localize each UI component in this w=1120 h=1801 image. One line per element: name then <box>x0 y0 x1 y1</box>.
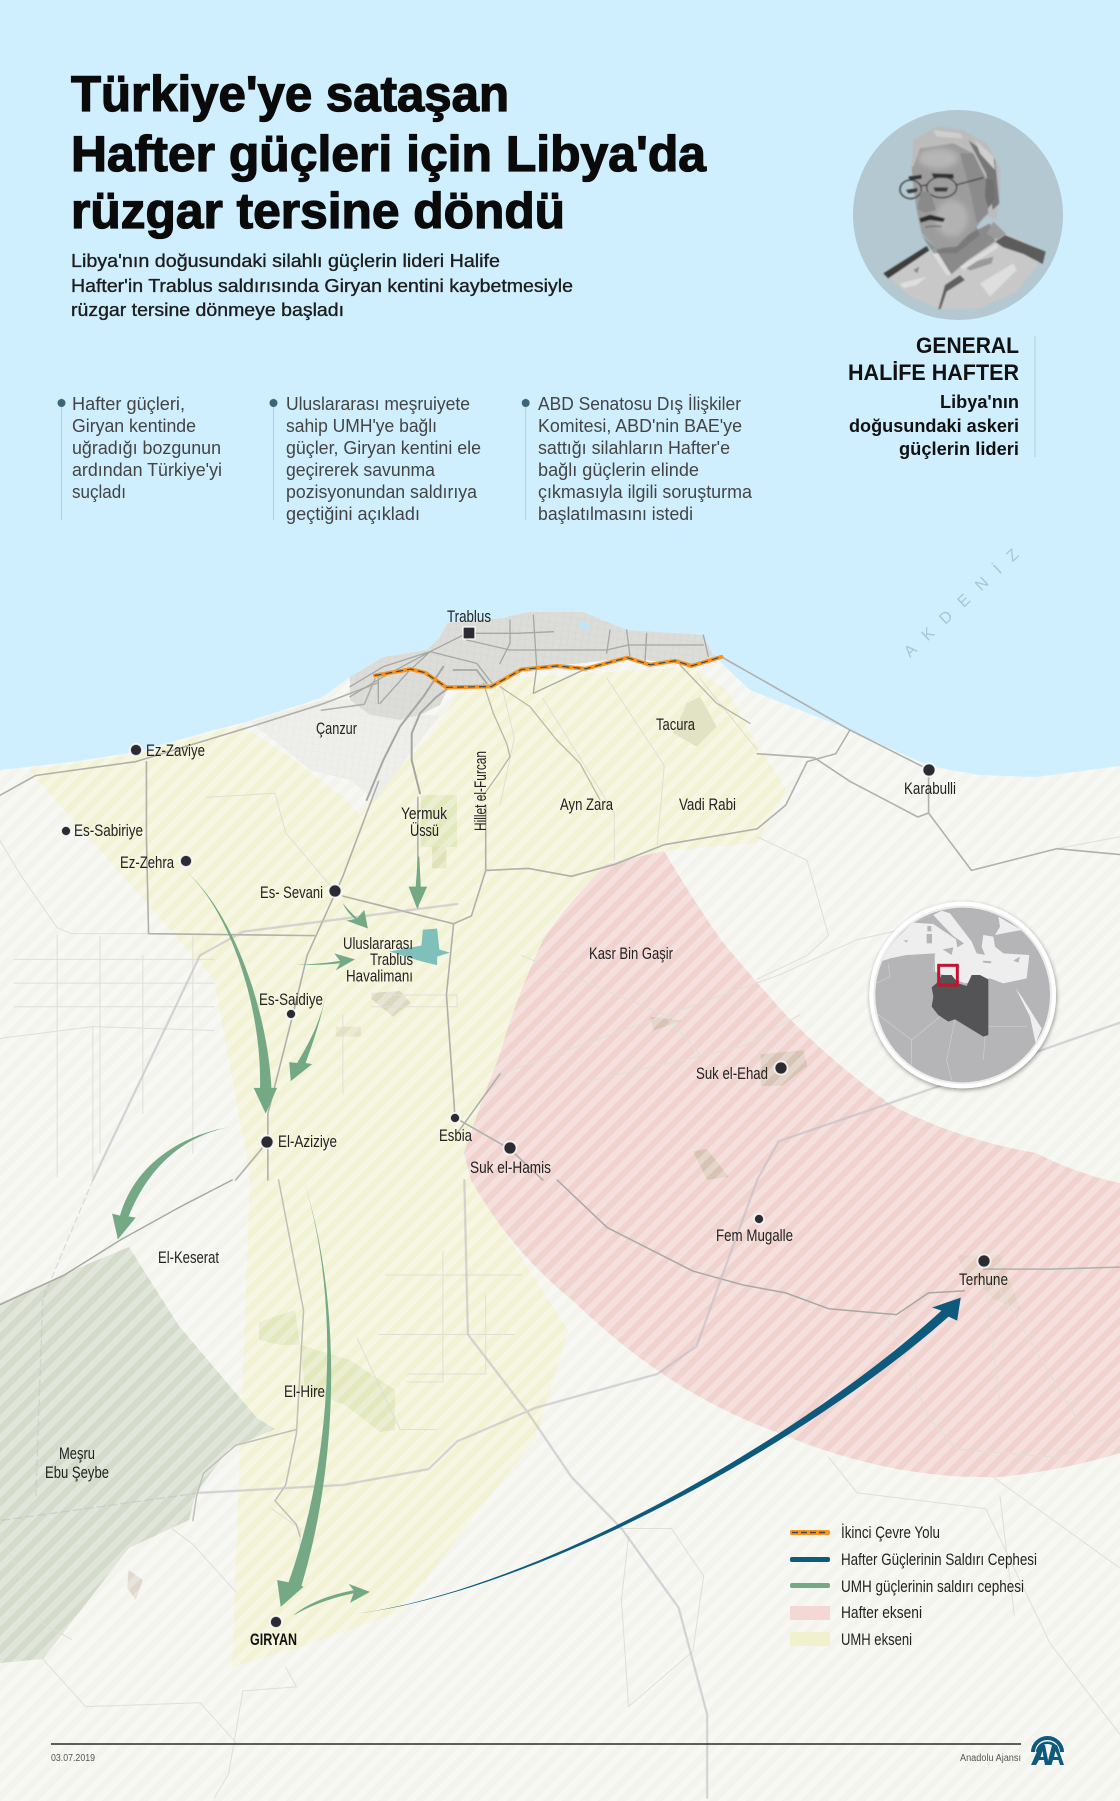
forehead highlight <box>918 148 958 168</box>
subtitle: Libya'nın doğusundaki silahlı güçlerin lideri Halife <box>71 250 500 271</box>
bullet 2: geçtiğini açıkladı <box>286 503 420 524</box>
bullet 2: güçler, Giryan kentini ele <box>286 437 481 458</box>
arrow: toward Es-Sevani airport road <box>343 903 368 929</box>
legend: ring road <box>790 1523 940 1542</box>
sea label: Akdeniz: AKDENİZ <box>900 545 1023 661</box>
bullet 2: Uluslararası meşruiyete <box>286 393 470 414</box>
footer <box>51 1736 1064 1765</box>
legend: UMH front: UMH güçlerinin saldırı cephesi <box>841 1578 1024 1596</box>
map labels: Es-Saidiye <box>259 991 323 1009</box>
map labels: Trablus <box>370 951 413 969</box>
role: doğusundaki askeri <box>849 415 1019 436</box>
bullet 1: Giryan kentinde <box>72 415 196 436</box>
map labels: Es- Sevani <box>260 884 323 902</box>
hair streaks <box>933 130 995 170</box>
neck <box>935 223 995 275</box>
red locator square <box>939 965 957 985</box>
bullet 1: suçladı <box>72 481 126 502</box>
map labels: Terhune <box>959 1271 1008 1289</box>
glasses <box>900 177 983 199</box>
map labels: Ez-Zaviye <box>146 742 205 760</box>
map labels: Suk el-Hamis <box>470 1159 551 1177</box>
bullet 1: ardından Türkiye'yi <box>72 459 222 480</box>
bullet 3 <box>522 393 753 524</box>
airport <box>389 929 450 965</box>
arrow: toward airport from the west <box>296 953 355 970</box>
map labels: Uluslararası <box>343 935 413 953</box>
arrow: Giryan east <box>293 1584 370 1616</box>
map labels: Esbia <box>439 1127 473 1145</box>
map labels: El-Aziziye <box>278 1133 337 1151</box>
Red Sea <box>1016 988 1042 1043</box>
map labels: Meşru <box>59 1445 95 1463</box>
land <box>0 612 1120 1801</box>
Black Sea <box>995 917 1022 935</box>
arrow: Ez-Zehra to El-Aziziye <box>187 872 277 1114</box>
mouth <box>925 226 942 227</box>
arrows: UMH forces (lower map) <box>112 1127 961 1616</box>
borders <box>877 953 1027 1080</box>
bullet 1: uğradığı bozgunun <box>72 437 221 458</box>
main roads lower map <box>0 1180 1120 1536</box>
bullet 2: sahip UMH'ye bağlı <box>286 415 437 436</box>
pale purple trunk roads <box>0 904 1120 1798</box>
legend: ring road: İkinci Çevre Yolu <box>841 1523 940 1542</box>
bullet 1: Hafter güçleri, <box>72 393 185 414</box>
bullet 3: sattığı silahların Hafter'e <box>538 437 730 458</box>
title: rüzgar tersine döndü <box>71 183 565 239</box>
subtitle: rüzgar tersine dönmeye başladı <box>71 299 344 320</box>
main roads upper map <box>0 657 1120 1180</box>
arrows: UMH forces (upper map) <box>187 857 427 1114</box>
name <box>848 333 1019 385</box>
arrow: El-Aziziye to Giryan <box>277 1180 331 1607</box>
jaw shadow <box>922 227 980 253</box>
legend <box>790 1523 1037 1649</box>
map labels: Kasr Bin Gaşir <box>589 945 673 963</box>
legend: Hafter front: Hafter Güçlerinin Saldırı Cephesi <box>841 1551 1037 1569</box>
bullet 2: pozisyonundan saldırıya <box>286 481 478 502</box>
title <box>71 66 707 239</box>
temple shadow <box>960 154 989 222</box>
Italy and islands <box>913 915 964 947</box>
legend: Hafter axis <box>790 1604 922 1622</box>
map labels: Trablus <box>447 608 491 626</box>
bullet 3: Komitesi, ABD'nin BAE'ye <box>538 415 742 436</box>
map labels <box>45 608 1008 1649</box>
bullet 3: başlatılmasını istedi <box>538 503 693 524</box>
legend: UMH axis <box>790 1631 912 1649</box>
source: Anadolu Ajansı <box>960 1753 1021 1764</box>
legend: UMH axis: UMH ekseni <box>841 1631 912 1649</box>
logo: Anadolu Agency <box>1031 1736 1064 1765</box>
brows <box>908 173 954 180</box>
nose <box>917 192 936 213</box>
legend: Hafter front <box>790 1551 1037 1569</box>
map labels: Vadi Rabi <box>679 796 736 814</box>
map labels: Havalimanı <box>346 968 413 986</box>
diagonal stripes <box>0 668 1120 1667</box>
legend: Hafter axis: Hafter ekseni <box>841 1604 922 1622</box>
subtitle <box>71 250 573 320</box>
name: HALİFE HAFTER <box>848 360 1019 385</box>
shirt <box>887 233 1045 309</box>
ear <box>984 178 992 208</box>
arrow: Es-Saidiye front <box>289 981 329 1081</box>
portrait of Hafter <box>853 110 1063 320</box>
zone: UMH ekseni <box>29 667 786 1667</box>
hair <box>912 127 1000 220</box>
arrow: El-Aziziye west <box>112 1127 232 1239</box>
inset locator globe <box>869 900 1057 1090</box>
land-use patches, upper map <box>336 748 807 1180</box>
name block <box>848 333 1035 459</box>
map labels: Karabulli <box>904 780 956 798</box>
arrow: Hafter forces front to Terhune <box>357 1298 961 1614</box>
bullet 3: ABD Senatosu Dış İlişkiler <box>538 393 741 414</box>
map labels: Suk el-Ehad <box>696 1065 768 1083</box>
map labels: Fem Mugalle <box>716 1227 793 1245</box>
bullet 2 <box>270 393 481 524</box>
arrow: from Yermuk base <box>409 857 427 909</box>
role: Libya'nın <box>940 391 1019 412</box>
collar edge <box>930 243 998 275</box>
title: Hafter güçleri için Libya'da <box>71 126 707 182</box>
cheek highlight <box>935 200 968 237</box>
moustache <box>919 215 945 223</box>
bullet 3: çıkmasıyla ilgili soruşturma <box>538 481 753 502</box>
Canzur street texture <box>250 700 440 800</box>
shirt folds <box>900 263 1017 297</box>
map labels: Ayn Zara <box>560 796 614 814</box>
legend: UMH front <box>790 1578 1024 1596</box>
Canzur suburb <box>250 700 440 800</box>
Tripoli lake and Tacura patch <box>577 621 717 747</box>
map labels: Ez-Zehra <box>120 854 175 872</box>
left shoulder strap <box>883 246 929 278</box>
bullet 3: bağlı güçlerin elinde <box>538 459 699 480</box>
map labels: Ebu Şeybe <box>45 1464 109 1482</box>
zone: Meşru Ebu Şeybe <box>0 1247 275 1663</box>
right shoulder strap <box>995 235 1046 264</box>
Tripoli urban area <box>350 612 723 720</box>
map labels: Üssü <box>410 822 439 840</box>
date: 03.07.2019 <box>51 1753 95 1764</box>
Tripoli road network <box>350 615 750 800</box>
bullet 1 <box>58 393 222 520</box>
title: Türkiye'ye sataşan <box>71 66 509 122</box>
role <box>849 391 1019 459</box>
eyes <box>906 187 948 193</box>
dark hair side <box>968 140 999 210</box>
map labels: Çanzur <box>316 720 357 738</box>
name: GENERAL <box>916 333 1019 358</box>
Libya <box>932 975 988 1037</box>
collar camouflage <box>962 222 1006 271</box>
İkinci Çevre Yolu road <box>375 657 721 687</box>
settlement markers <box>61 627 990 1628</box>
face <box>912 140 993 248</box>
map labels: El-Hire <box>284 1383 325 1401</box>
Mediterranean sea <box>875 911 1029 983</box>
bullet 2: geçirerek savunma <box>286 459 436 480</box>
map labels: Tacura <box>656 716 696 734</box>
map labels: Hillet el-Furcan <box>472 751 490 831</box>
map <box>0 548 1120 1801</box>
placket <box>938 275 965 309</box>
minor roads <box>0 679 1120 1798</box>
green fields near El-Hire <box>259 795 457 1432</box>
map labels: Yermuk <box>401 805 448 823</box>
subtitle: Hafter'in Trablus saldırısında Giryan kentini kaybetmesiyle <box>71 275 573 296</box>
Tripoli street texture <box>350 612 723 720</box>
role: güçlerin lideri <box>899 438 1019 459</box>
map labels: El-Keserat <box>158 1249 219 1267</box>
land-use patches, lower map <box>127 1255 1021 1600</box>
zone: Hafter ekseni <box>464 851 1120 1477</box>
map labels: GIRYAN <box>250 1631 297 1649</box>
map labels: Es-Sabiriye <box>74 822 143 840</box>
